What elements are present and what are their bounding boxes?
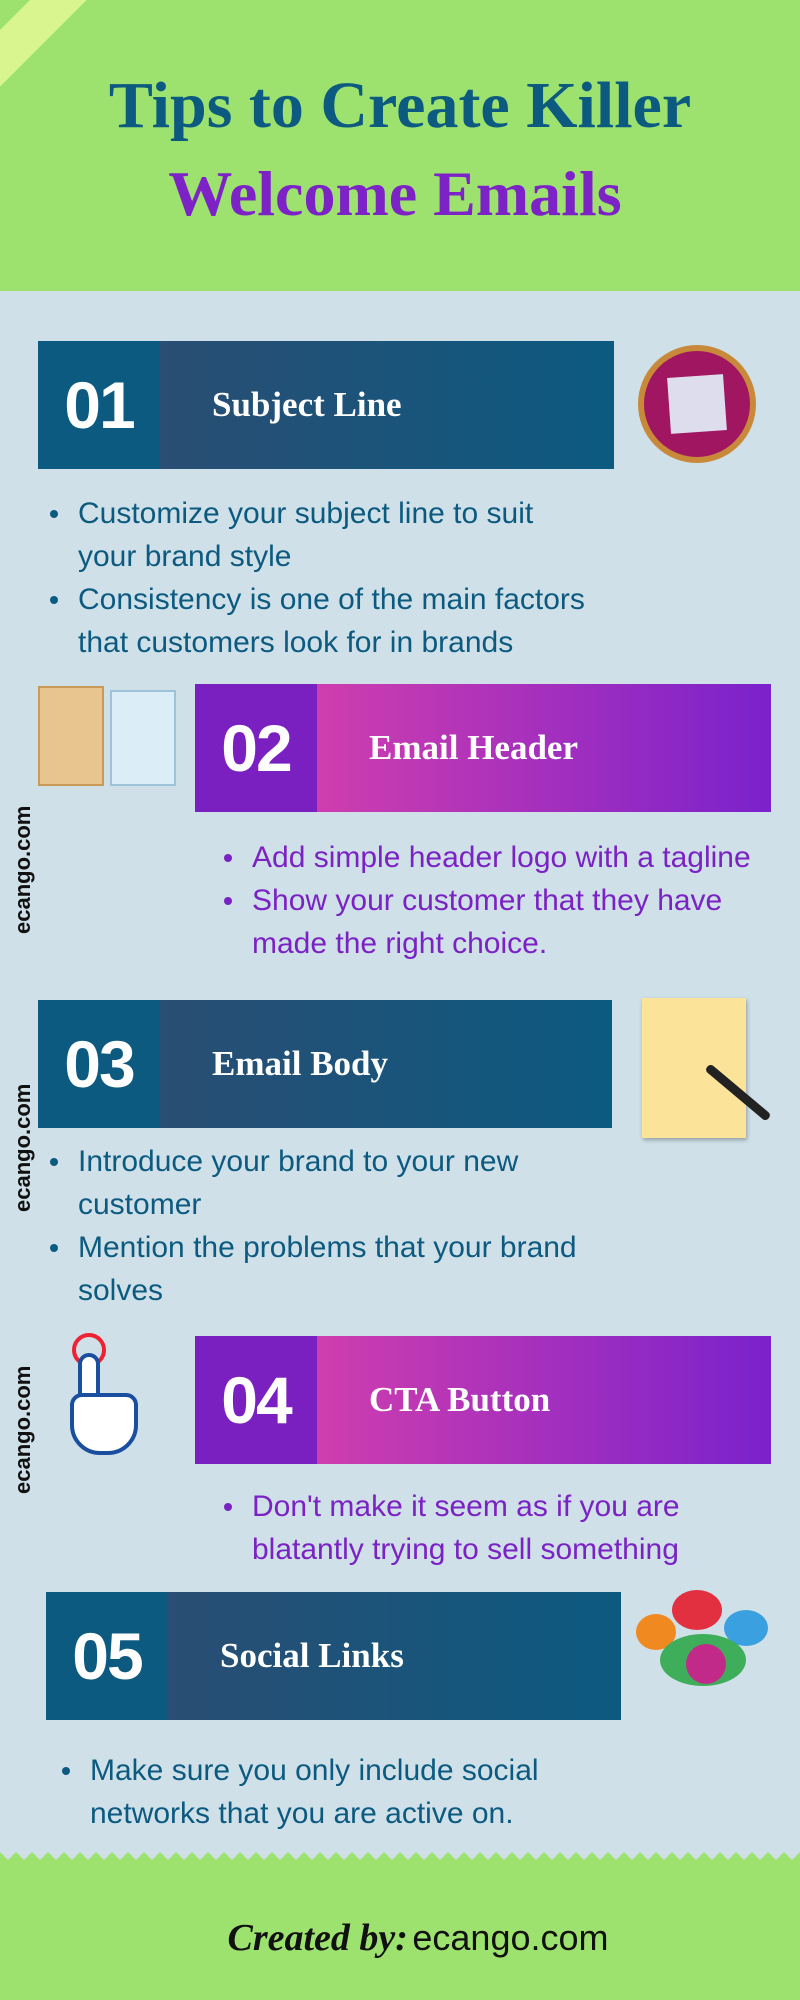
bullets 03: Introduce your brand to your new bbox=[78, 1145, 518, 1178]
bullets 05: Make sure you only include social bbox=[90, 1754, 539, 1787]
section 01 bar bbox=[38, 341, 614, 469]
section 04 bar: 04 bbox=[221, 1363, 291, 1437]
title bbox=[109, 69, 691, 229]
title: Welcome Emails bbox=[168, 158, 622, 229]
bullets 01 bbox=[50, 497, 585, 659]
bullets 04: Don't make it seem as if you are bbox=[252, 1490, 680, 1523]
icon: envelopes bbox=[38, 686, 176, 786]
vertical text: ecango.com bbox=[10, 1366, 35, 1494]
bullets 02 bbox=[224, 841, 751, 960]
bullets 01: your brand style bbox=[78, 540, 291, 573]
icon: hand pointer bbox=[70, 1333, 138, 1455]
bullets 02: Add simple header logo with a tagline bbox=[252, 841, 751, 874]
title: Tips to Create Killer bbox=[109, 69, 691, 142]
icon: social bubbles bbox=[636, 1590, 768, 1686]
bullets 03: Mention the problems that your brand bbox=[78, 1231, 577, 1264]
section 02 bar: Email Header bbox=[369, 728, 578, 767]
header band bbox=[0, 0, 800, 291]
section 04 bar: CTA Button bbox=[369, 1380, 550, 1419]
footer credit: Created by: ecango.com bbox=[227, 1917, 609, 1959]
section 05 bar bbox=[46, 1592, 621, 1720]
section 01 bar: 01 bbox=[64, 368, 134, 442]
bullets 03: customer bbox=[78, 1188, 201, 1221]
bullets 01: Customize your subject line to suit bbox=[78, 497, 533, 530]
vertical text: ecango.com bbox=[10, 806, 35, 934]
bullets 04 bbox=[224, 1490, 680, 1566]
footer bbox=[0, 1860, 800, 2000]
bullets 02: made the right choice. bbox=[252, 927, 547, 960]
section 02 bar bbox=[195, 684, 771, 812]
section 05 bar: Social Links bbox=[220, 1636, 404, 1675]
bullets 05 bbox=[62, 1754, 539, 1830]
section 02 bar: 02 bbox=[221, 711, 291, 785]
bullets 04: blatantly trying to sell something bbox=[252, 1533, 679, 1566]
vertical text: ecango.com bbox=[10, 1084, 35, 1212]
icon: quill circle bbox=[638, 345, 756, 463]
bullets 05: networks that you are active on. bbox=[90, 1797, 514, 1830]
section 05 bar: 05 bbox=[72, 1619, 142, 1693]
bullets 02: Show your customer that they have bbox=[252, 884, 722, 917]
section 03 bar: Email Body bbox=[212, 1044, 388, 1083]
bullets 03: solves bbox=[78, 1274, 163, 1307]
section 03 bar bbox=[38, 1000, 612, 1128]
bullets 01: Consistency is one of the main factors bbox=[78, 583, 585, 616]
icon: note and pen bbox=[640, 998, 770, 1142]
bullets 01: that customers look for in brands bbox=[78, 626, 513, 659]
bullets 03 bbox=[50, 1145, 577, 1307]
section 01 bar: Subject Line bbox=[212, 385, 402, 424]
section 04 bar bbox=[195, 1336, 771, 1464]
section 03 bar: 03 bbox=[64, 1027, 134, 1101]
